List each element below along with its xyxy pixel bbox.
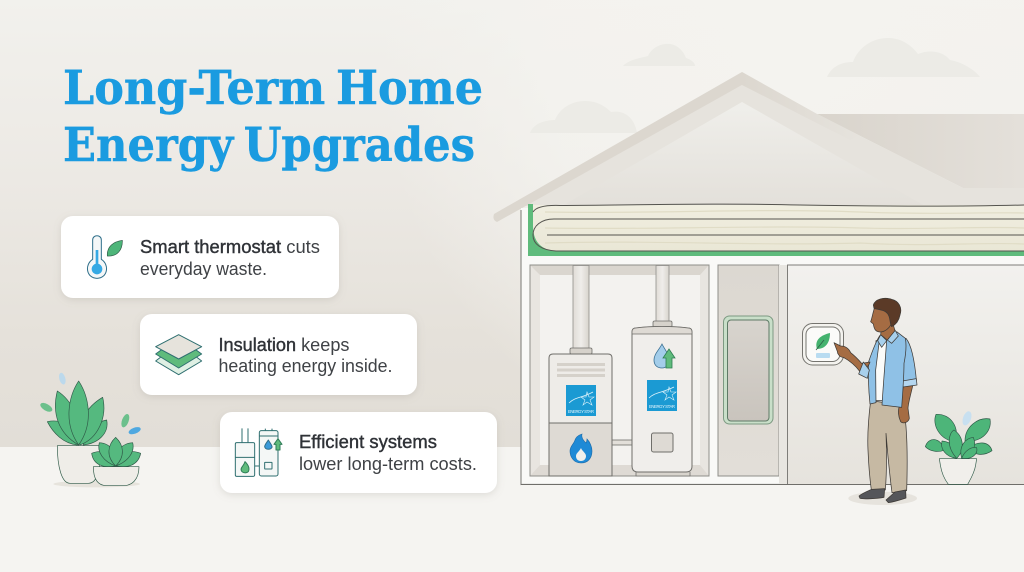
water heater [632,326,692,476]
furnace vent pipe [570,266,592,354]
heater energy star label: ENERGY STAR [649,404,675,409]
clouds [530,38,980,133]
roof left inner band [522,85,742,206]
pot [939,459,977,484]
icon: insulation layers [156,335,202,375]
back forearm hand [898,383,913,423]
white shirt [875,341,888,401]
gable [555,100,930,207]
jacket body [868,335,880,404]
roof right band [742,72,1024,206]
title [63,61,483,173]
title: Long-Term Home [63,61,483,116]
shadow [848,492,917,505]
heater energy star label [647,380,677,411]
small pot [93,467,139,486]
potted plants left [39,372,142,487]
display bar [816,353,830,358]
icon: thermometer and leaf [87,236,122,278]
right room wall [788,265,1024,484]
large plant leaves [47,381,107,445]
floor under person [521,485,1024,572]
face [871,307,893,332]
furnace [549,354,612,476]
card: insulation [140,314,417,395]
jacket sleeve [898,338,917,386]
shadow [53,481,140,487]
trousers [868,401,907,493]
control box [652,433,673,452]
hair [873,298,901,327]
text: Insulation keeps [218,335,350,355]
card: smart thermostat: everyday waste. [140,259,267,279]
connector pipe [612,440,652,445]
furnace energy star label: ENERGY STAR [568,409,594,414]
icon: furnace and water heater [235,428,282,476]
large pot [57,446,101,483]
smart thermostat on wall [802,324,844,365]
side column [779,265,788,484]
person [834,298,917,505]
collar [878,335,887,347]
roof left outer band [493,72,742,222]
card: efficient systems: lower long-term costs. [299,454,477,474]
card: insulation: heating energy inside. [218,356,392,376]
leaves [925,414,992,459]
water drops [932,410,973,452]
potted plant right [925,410,992,484]
shoes [859,489,885,499]
house roof [493,72,1024,222]
utility room [530,265,709,476]
house frame [521,205,1024,484]
text: Efficient systems [299,432,437,452]
small plant leaves [92,437,141,467]
card: smart thermostat [61,216,339,298]
rolled cuff [859,362,869,378]
roof right dark strip [742,72,860,140]
pointing forearm [834,343,870,372]
water heater vent pipe [653,266,672,327]
flame icon [570,434,592,463]
water drop and arrow icon [654,344,675,368]
text: Smart thermostat cuts [140,237,320,257]
floating leaves [39,372,142,436]
insulation roll [528,204,1024,256]
leaf icon [816,333,830,349]
title: Energy Upgrades [63,118,475,173]
neck [881,325,895,340]
central wall panel [718,265,779,476]
card: efficient systems [220,412,497,493]
